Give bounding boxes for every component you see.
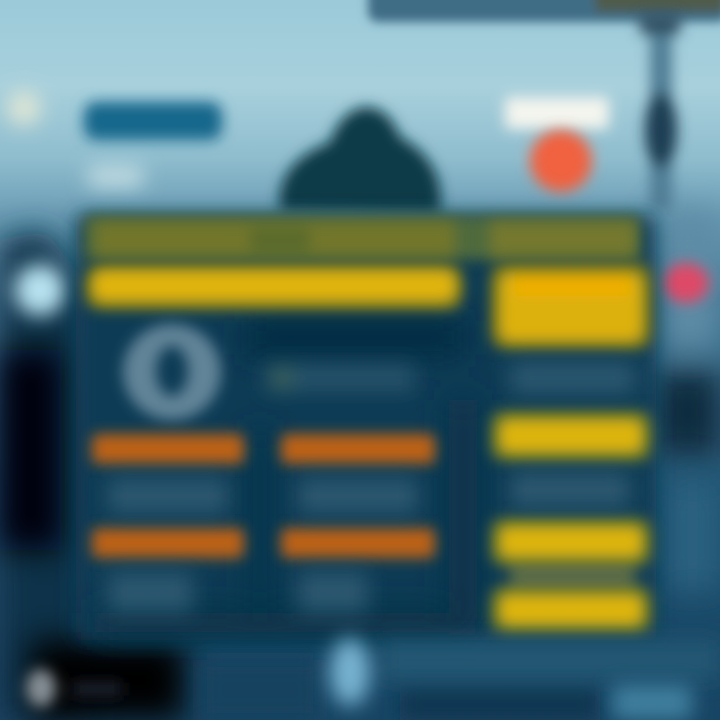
background: left dark foreground <box>0 230 90 720</box>
footer light block right <box>612 685 692 720</box>
faint light patch under badge <box>88 165 143 187</box>
teal label badge <box>84 102 222 140</box>
text block beside ring <box>265 365 415 391</box>
background: bottom-left black area <box>30 640 185 720</box>
lamp post silhouette <box>640 14 680 210</box>
label: orange bar top middle <box>281 434 435 464</box>
heading: title text texture <box>95 222 635 256</box>
small glow top left <box>7 91 41 125</box>
background: left black shade <box>0 350 62 550</box>
top banner shape <box>368 0 720 22</box>
icon: light blue footer glow <box>330 638 370 706</box>
label: orange bar bottom left <box>92 528 244 558</box>
icon: footer logo bottom left <box>26 669 122 707</box>
white sign <box>505 97 609 129</box>
heading: olive title bar <box>84 216 640 260</box>
panel: main dark panel <box>76 215 656 640</box>
callout: large yellow box <box>499 272 643 342</box>
background: right side tones <box>655 210 720 590</box>
glowing circle left <box>14 264 66 316</box>
red marker right <box>663 263 709 303</box>
footer band <box>200 640 720 720</box>
label: orange bar bottom middle <box>281 528 435 558</box>
label: yellow bar right 3 <box>499 594 643 626</box>
icon: ring <box>123 324 221 420</box>
label: yellow bar right 2 <box>499 526 643 558</box>
dark tree silhouette <box>279 107 441 214</box>
text blocks under bars <box>108 362 635 612</box>
label: orange bar top left <box>92 434 244 464</box>
label: yellow bar right 1 <box>499 419 643 453</box>
heading: yellow bar <box>92 270 456 302</box>
glow: olive halo around yellow elements <box>85 262 652 635</box>
red circle <box>530 130 592 192</box>
panel: darker columns <box>95 320 478 635</box>
